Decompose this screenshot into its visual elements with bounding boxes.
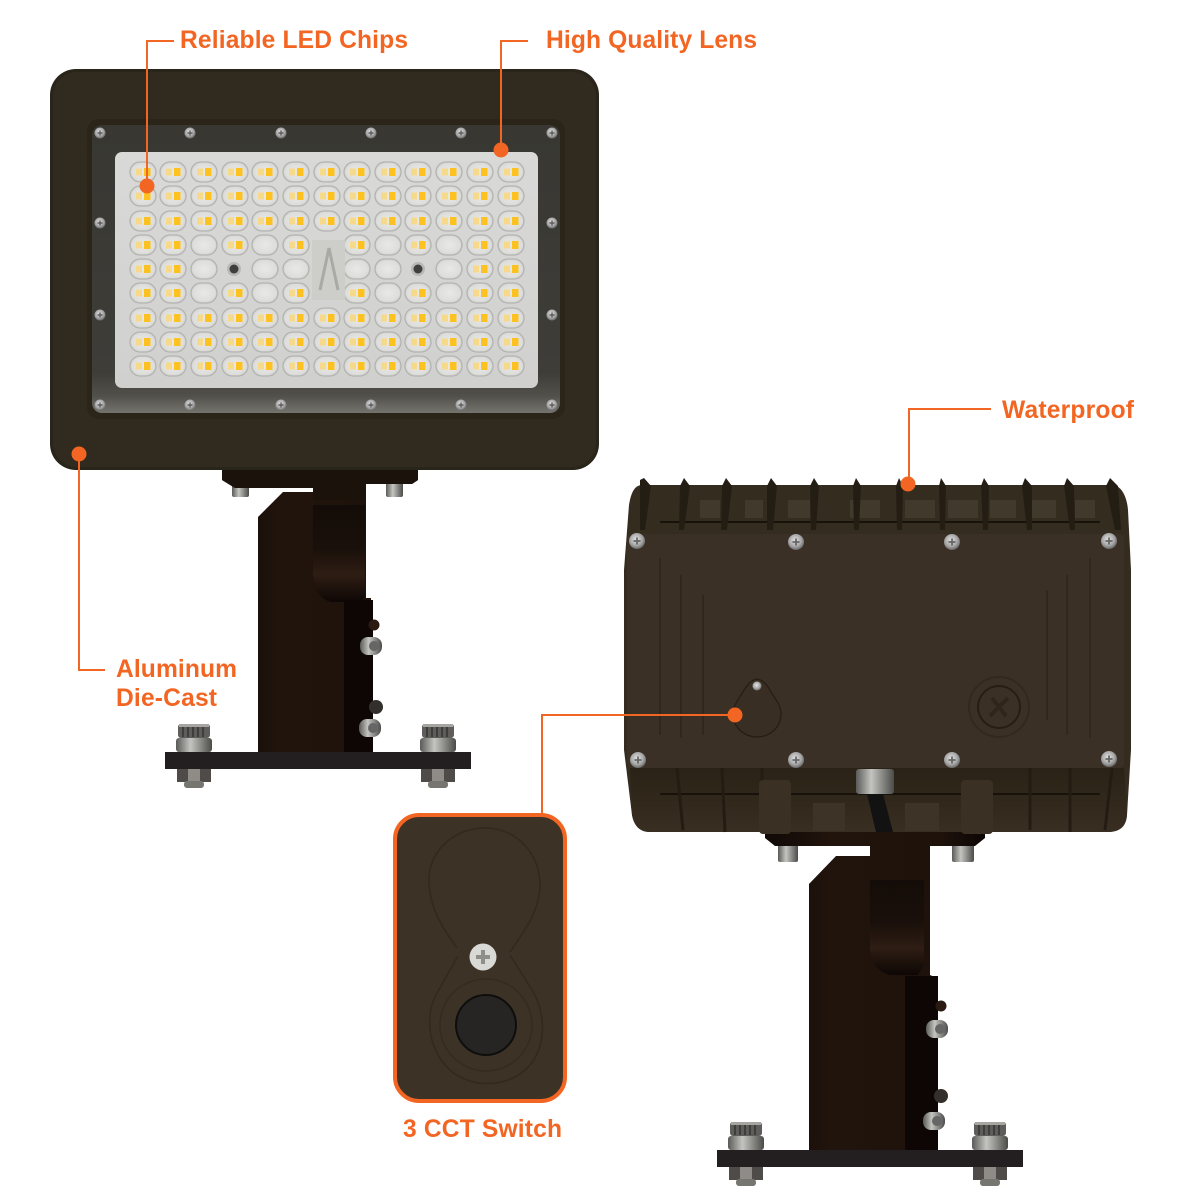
- LED module plate: [115, 152, 538, 388]
- panel: rear view of flood light: [624, 478, 1131, 1186]
- rear housing with fins: [624, 478, 1131, 834]
- label: Aluminum Die-Cast: [116, 656, 237, 712]
- label: Aluminum Die-Cast: Aluminum: [116, 656, 237, 683]
- rear mounting bar with bolts: [717, 1122, 1023, 1186]
- label: 3 CCT Switch: 3 CCT Switch: [403, 1116, 562, 1143]
- lens window: [92, 125, 560, 413]
- housing frame: [50, 69, 599, 470]
- label: High Quality Lens: High Quality Lens: [546, 27, 757, 54]
- mounting bar with bolts: [165, 724, 471, 788]
- leader: Waterproof: [900, 409, 991, 492]
- switch button: [456, 995, 516, 1055]
- CCT switch cover on rear housing: [733, 679, 781, 737]
- label: Waterproof: Waterproof: [1002, 397, 1135, 424]
- knockout plug: [969, 677, 1029, 737]
- panel: 3 CCT switch detail: [395, 815, 565, 1101]
- mounting stem, front view: [222, 466, 418, 752]
- leader: High Quality Lens: [494, 41, 528, 158]
- switch screw: [470, 944, 496, 970]
- leader: Reliable LED Chips: [140, 41, 174, 194]
- rear mounting stem: [765, 826, 985, 1150]
- lower fin section: [630, 768, 1127, 834]
- panel: front view of flood light: [50, 69, 599, 788]
- top fin section: [640, 478, 1121, 530]
- label: Aluminum Die-Cast: Die-Cast: [116, 685, 217, 712]
- leader: Aluminum Die-Cast: [72, 446, 105, 670]
- label: Reliable LED Chips: Reliable LED Chips: [180, 27, 408, 54]
- lower switch housing rings: [430, 955, 542, 1084]
- teardrop cover outline: [429, 828, 540, 952]
- cable gland: [856, 769, 894, 832]
- leader: 3 CCT Switch: [542, 708, 742, 815]
